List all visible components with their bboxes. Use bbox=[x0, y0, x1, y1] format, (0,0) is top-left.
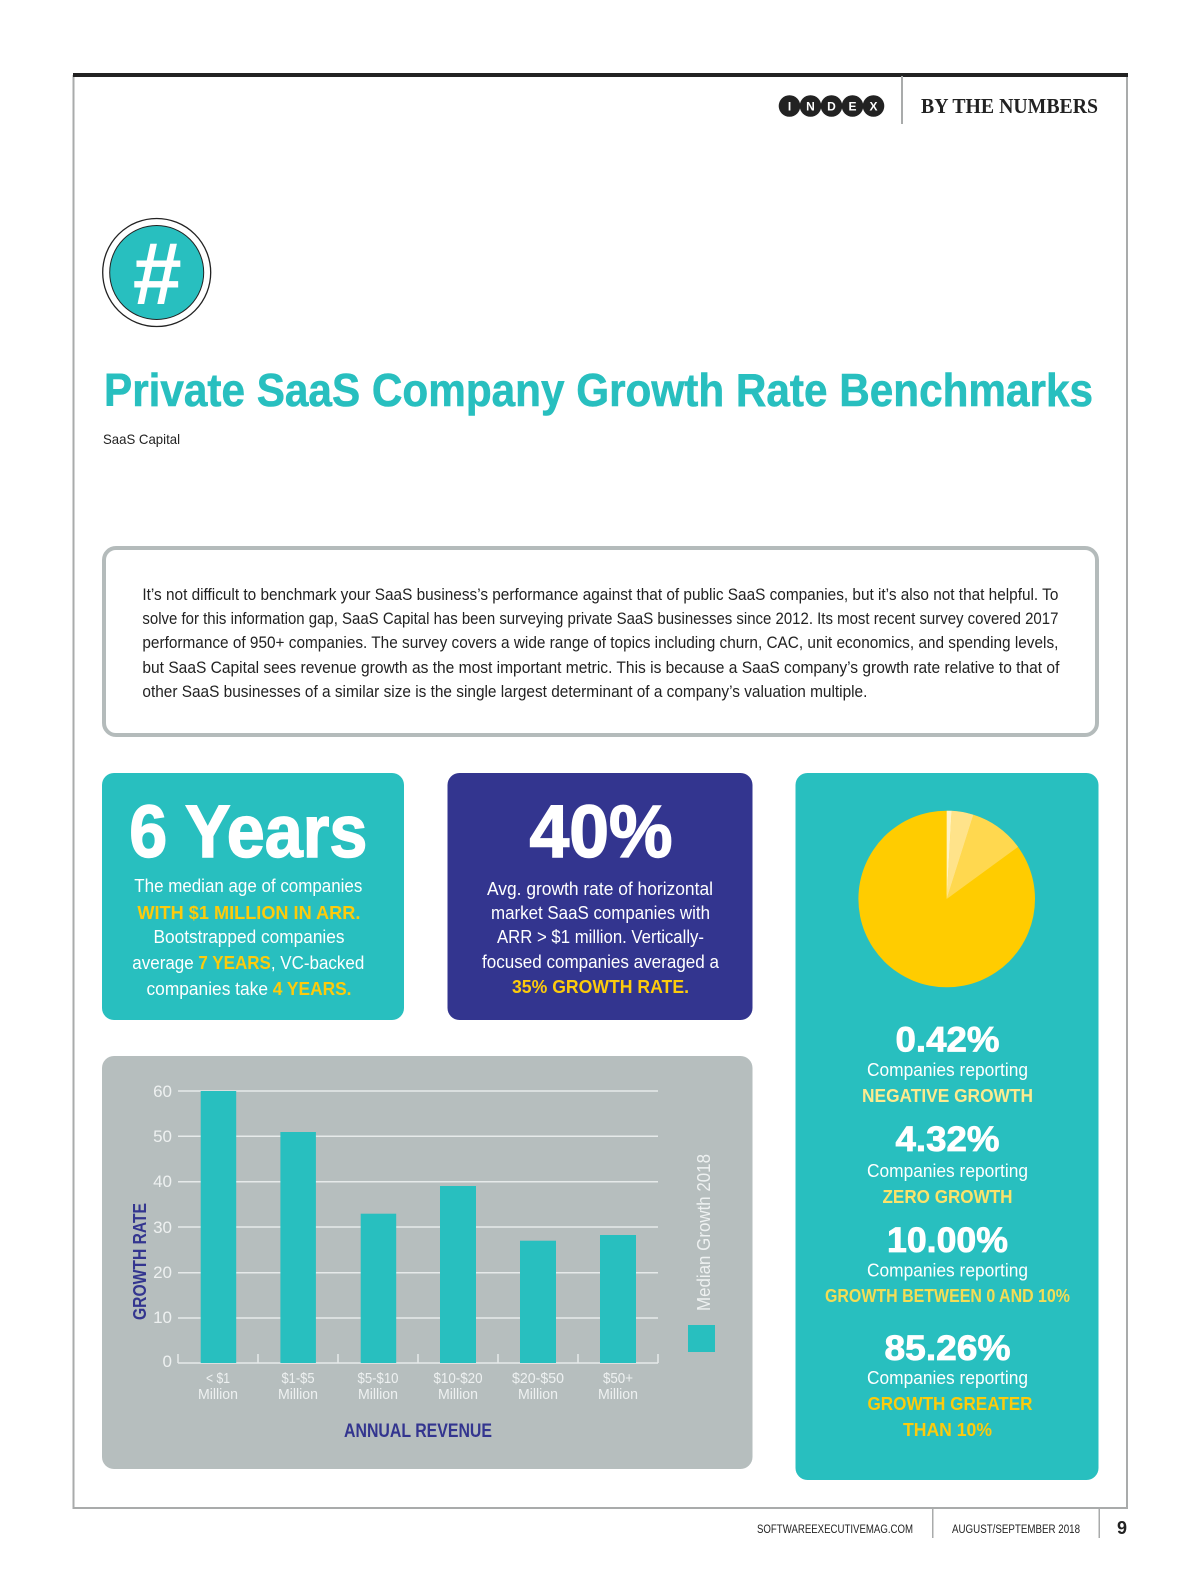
y axis labels: 0 bbox=[163, 1352, 172, 1371]
y axis labels: 50 bbox=[153, 1127, 172, 1146]
icon: hash badge: # bbox=[132, 224, 181, 323]
panel: intro text: other SaaS businesses of a similar size is the single largest determinant of a company’s valuation multiple. bbox=[142, 682, 867, 701]
description: market SaaS companies with bbox=[491, 903, 710, 923]
header: index badge and section label bbox=[779, 76, 1098, 124]
stat: 6 Years: 6 Years bbox=[129, 790, 367, 873]
panel: 40 percent bbox=[448, 773, 752, 1020]
x axis labels: Million bbox=[438, 1386, 478, 1403]
y axis labels: 10 bbox=[153, 1308, 172, 1327]
stat: growth between 0 and 10 bbox=[825, 1221, 1070, 1306]
description: Bootstrapped companies bbox=[154, 927, 344, 947]
x axis labels: Million bbox=[198, 1386, 238, 1403]
icon: INDEX badge bbox=[779, 95, 884, 117]
footer: AUGUST/SEPTEMBER 2018 bbox=[952, 1524, 1080, 1536]
section label: BY THE NUMBERS bbox=[921, 94, 1098, 118]
x axis labels: Million bbox=[358, 1386, 398, 1403]
x axis labels: $50+ bbox=[603, 1370, 633, 1387]
x axis labels: Million bbox=[598, 1386, 638, 1403]
bars bbox=[201, 1091, 636, 1363]
stat: negative growth: 0.42% bbox=[896, 1020, 1000, 1060]
stat: 40%: 40% bbox=[530, 790, 672, 873]
stat: zero growth: ZERO GROWTH bbox=[882, 1187, 1012, 1207]
stat: growth greater than 10: 85.26% bbox=[884, 1329, 1010, 1368]
x axis labels bbox=[198, 1370, 638, 1403]
stat: growth greater than 10: Companies reporting bbox=[867, 1368, 1028, 1388]
icon: hash badge bbox=[103, 218, 211, 326]
stat: growth between 0 and 10: GROWTH BETWEEN 0 AND 10% bbox=[825, 1286, 1070, 1306]
x axis labels: $20-$50 bbox=[512, 1370, 564, 1387]
icon: INDEX badge: E bbox=[848, 100, 857, 114]
stat: growth greater than 10: THAN 10% bbox=[903, 1420, 992, 1440]
legend: Median Growth 2018 bbox=[694, 1154, 714, 1311]
panel: intro text: but SaaS Capital sees revenue growth as the most important metric. This is because a SaaS company’s growth rate relative to that of bbox=[142, 658, 1060, 677]
icon: INDEX badge: D bbox=[827, 100, 836, 114]
description: 35% GROWTH RATE. bbox=[512, 977, 689, 997]
stat: negative growth: NEGATIVE GROWTH bbox=[862, 1086, 1033, 1106]
stat: negative growth bbox=[862, 1020, 1033, 1106]
x axis labels: < $1 bbox=[206, 1370, 230, 1387]
description bbox=[132, 876, 364, 999]
legend bbox=[688, 1154, 715, 1352]
panel: intro text: solve for this information gap, SaaS Capital has been surveying private SaaS businesses since 2012. Its most recent survey covered 2017 bbox=[142, 609, 1058, 628]
panel: intro text bbox=[104, 548, 1097, 735]
icon: INDEX badge: X bbox=[869, 100, 878, 114]
y axis labels: 40 bbox=[153, 1172, 172, 1191]
stat: zero growth: Companies reporting bbox=[867, 1161, 1028, 1181]
description bbox=[482, 879, 720, 997]
description: focused companies averaged a bbox=[482, 952, 720, 972]
description: WITH $1 MILLION IN ARR. bbox=[137, 903, 360, 923]
source: SaaS Capital bbox=[103, 431, 180, 447]
footer: 9 bbox=[1117, 1518, 1127, 1538]
stat: zero growth: 4.32% bbox=[896, 1120, 1000, 1159]
description: ARR > $1 million. Vertically- bbox=[497, 927, 704, 947]
stat: growth greater than 10 bbox=[867, 1329, 1032, 1440]
description: Avg. growth rate of horizontal bbox=[487, 879, 713, 899]
y axis title: GROWTH RATE bbox=[130, 1203, 150, 1320]
page frame bbox=[73, 73, 1128, 1508]
panel: bar chart bbox=[102, 1056, 752, 1469]
x axis labels: $10-$20 bbox=[434, 1370, 482, 1387]
stat: growth between 0 and 10: 10.00% bbox=[887, 1221, 1008, 1260]
x axis labels: $5-$10 bbox=[358, 1370, 398, 1387]
panel: 6 years bbox=[102, 773, 404, 1020]
stat: growth greater than 10: GROWTH GREATER bbox=[868, 1394, 1032, 1414]
y axis labels bbox=[153, 1082, 172, 1371]
y axis labels: 60 bbox=[153, 1082, 172, 1101]
stat: zero growth bbox=[867, 1120, 1028, 1207]
description: The median age of companies bbox=[134, 876, 362, 896]
pie chart bbox=[858, 811, 1035, 987]
panel: intro text: It’s not difficult to benchmark your SaaS business’s performance against that of public SaaS companies, but it’s also not that helpful. To bbox=[142, 585, 1058, 604]
y axis labels: 30 bbox=[153, 1218, 172, 1237]
icon: INDEX badge: N bbox=[806, 100, 815, 114]
stat: negative growth: Companies reporting bbox=[867, 1060, 1028, 1080]
footer: SOFTWAREEXECUTIVEMAG.COM bbox=[757, 1524, 913, 1536]
footer bbox=[757, 1508, 1127, 1538]
stat: growth between 0 and 10: Companies reporting bbox=[867, 1260, 1028, 1280]
panel: intro text: performance of 950+ companies. The survey covers a wide range of topics including churn, CAC, unit economics, and spending levels, bbox=[142, 633, 1058, 652]
icon: INDEX badge: I bbox=[788, 100, 791, 114]
y axis labels: 20 bbox=[153, 1263, 172, 1282]
x axis labels: Million bbox=[278, 1386, 318, 1403]
x axis title: ANNUAL REVENUE bbox=[344, 1421, 492, 1442]
title: Private SaaS Company Growth Rate Benchmarks bbox=[104, 364, 1093, 416]
description: average 7 YEARS, VC-backed bbox=[132, 953, 364, 973]
panel: growth distribution bbox=[796, 773, 1098, 1480]
x axis labels: $1-$5 bbox=[282, 1370, 314, 1387]
description: companies take 4 YEARS. bbox=[146, 979, 352, 999]
x axis labels: Million bbox=[518, 1386, 558, 1403]
